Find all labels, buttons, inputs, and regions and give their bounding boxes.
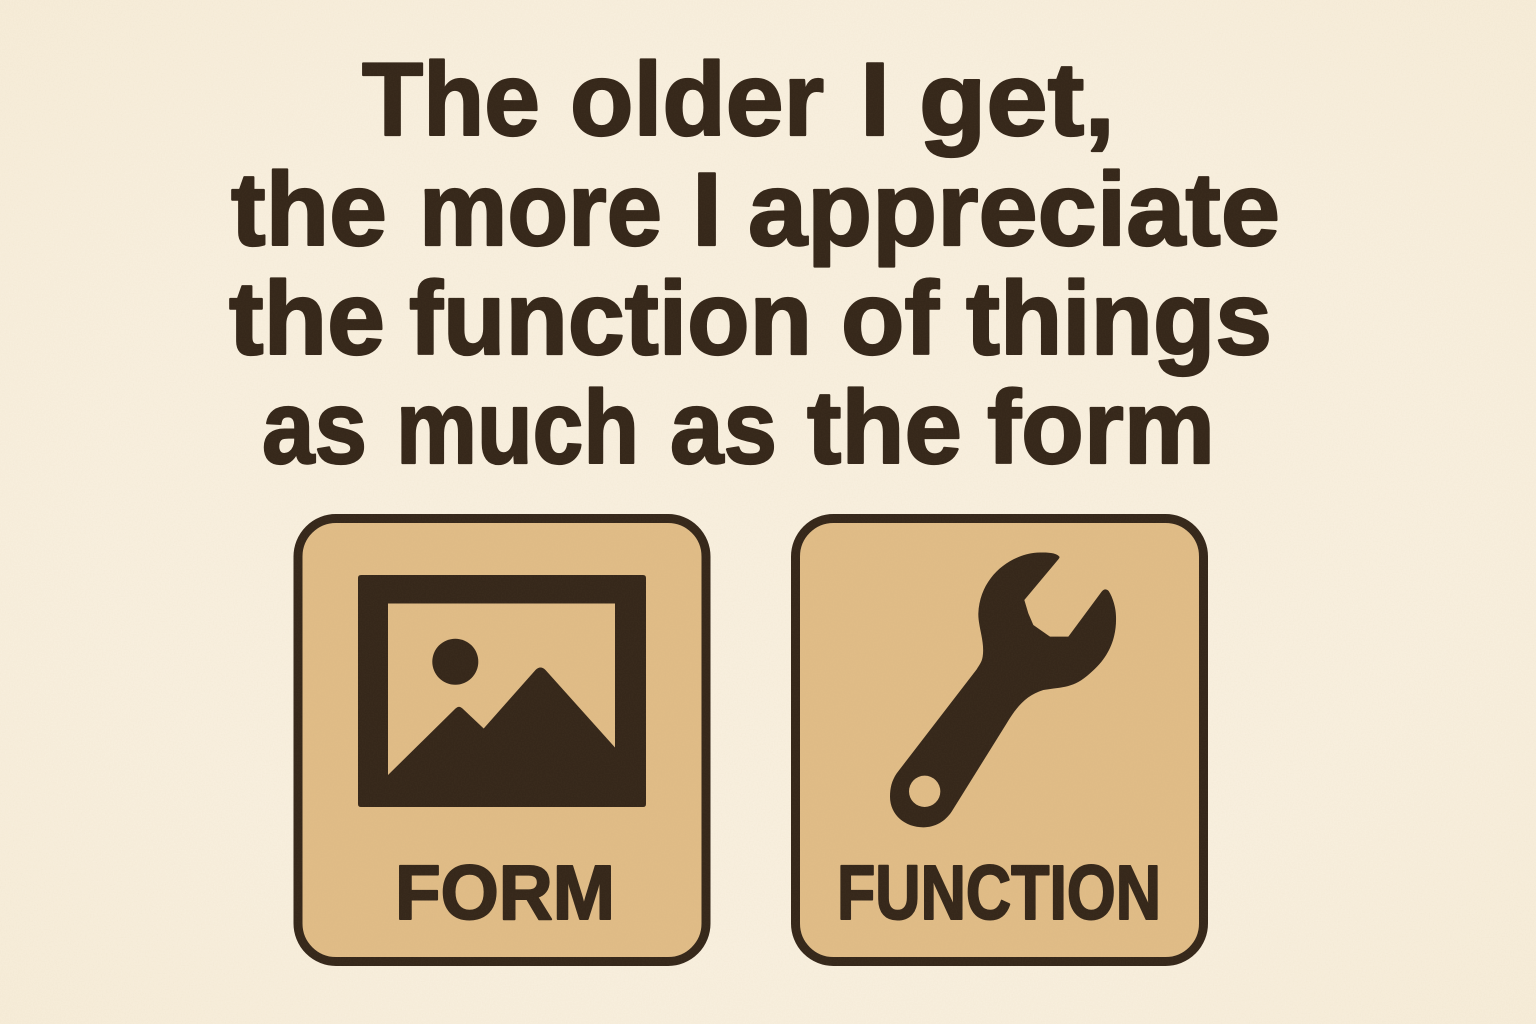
title line 4: much [396,370,639,486]
title line 3: function [409,261,812,377]
title line 4: form [987,370,1215,486]
title line 2: I [692,152,722,268]
title line 2: appreciate [748,152,1280,268]
title line 4 [262,370,1215,486]
title line 1: I [860,42,890,158]
form card background [298,518,706,962]
form label: FORM [395,850,615,936]
panel: form [298,518,706,962]
picture frame and mountains [358,575,646,807]
title line 4: as [262,370,367,486]
title line 4: the [807,370,962,486]
title line 2: more [419,152,662,268]
icon: wrench [890,552,1116,827]
title line 3 [229,261,1272,377]
title line 3: of [841,261,939,377]
title line 4: as [670,370,777,486]
title line 1: The [362,42,540,158]
icon: framed picture with sun and mountains [358,575,646,807]
title line 2: the [231,152,387,268]
title line 3: the [229,261,385,377]
title line 3: things [966,261,1272,377]
title line 2 [231,152,1280,268]
function card background [796,518,1204,962]
function label: FUNCTION [837,850,1161,936]
title [229,42,1280,486]
sun [432,639,478,685]
panel: function [796,518,1204,962]
title line 1: get, [919,42,1115,158]
title line 1 [362,42,1115,158]
title line 1: older [570,42,824,158]
